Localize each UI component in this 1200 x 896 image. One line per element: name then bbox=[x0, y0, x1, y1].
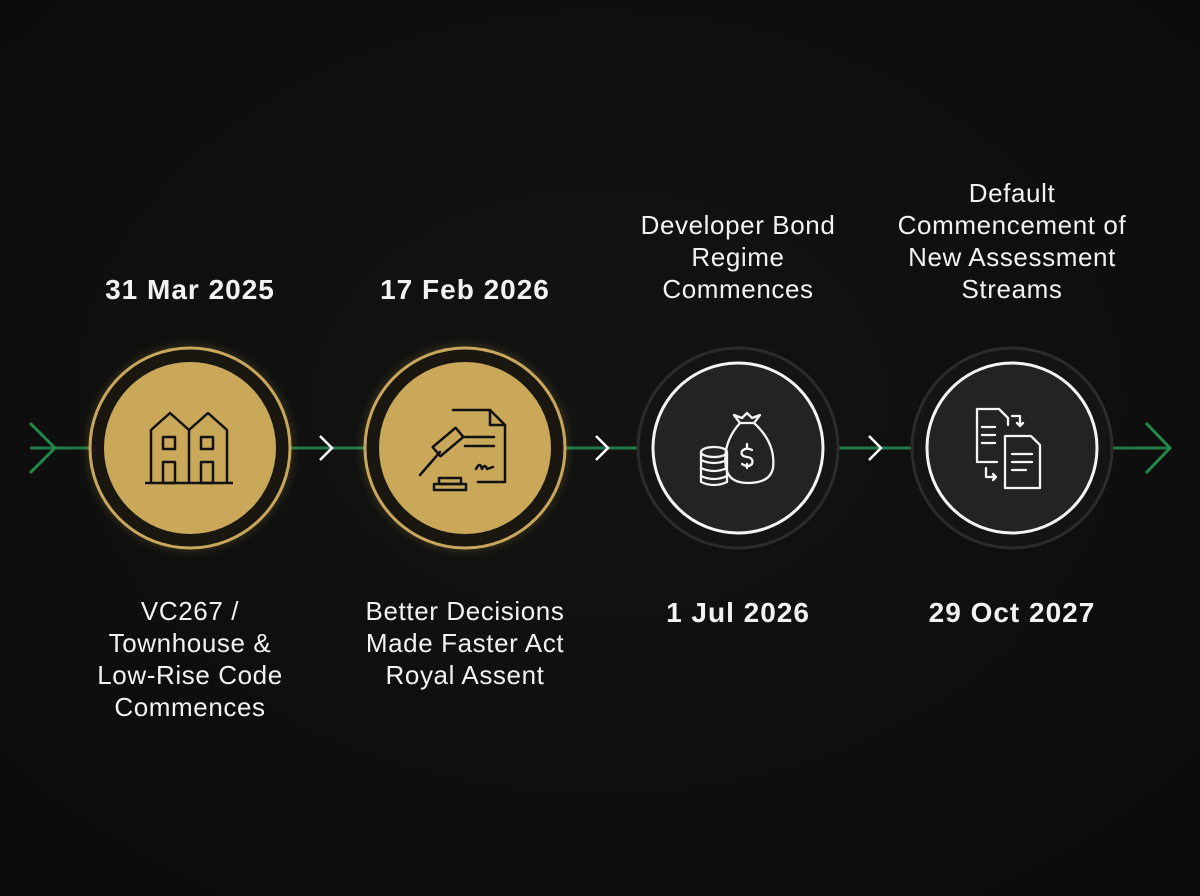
milestone 2: Better Decisions bbox=[366, 596, 564, 626]
milestone 3: Commences bbox=[662, 274, 814, 304]
milestone 2 bbox=[365, 274, 565, 690]
milestone 4: Streams bbox=[961, 274, 1063, 304]
milestone 1 bbox=[90, 274, 290, 722]
milestone 4: New Assessment bbox=[908, 242, 1116, 272]
icon: gavel and document bbox=[420, 410, 505, 490]
milestone 2: 17 Feb 2026 bbox=[380, 274, 550, 305]
milestone 1: 31 Mar 2025 bbox=[105, 274, 275, 305]
milestone 3 bbox=[638, 210, 838, 628]
milestone 1: Townhouse & bbox=[109, 628, 271, 658]
milestone 4: 29 Oct 2027 bbox=[929, 597, 1095, 628]
milestone 4 bbox=[898, 178, 1126, 628]
milestone 3: 1 Jul 2026 bbox=[666, 597, 810, 628]
milestone 3: Developer Bond bbox=[641, 210, 835, 240]
milestone 1: Commences bbox=[114, 692, 266, 722]
milestone 4: Default bbox=[969, 178, 1055, 208]
icon: money bag and coins bbox=[701, 413, 773, 485]
timeline line bbox=[30, 423, 1170, 473]
milestone 2: Made Faster Act bbox=[366, 628, 564, 658]
milestone 4: Commencement of bbox=[898, 210, 1126, 240]
arrow: chevron 2 bbox=[596, 436, 608, 460]
milestone 3: Regime bbox=[691, 242, 785, 272]
milestone 1: Low-Rise Code bbox=[97, 660, 283, 690]
arrow: chevron 1 bbox=[320, 436, 332, 460]
arrow: chevron 3 bbox=[869, 436, 881, 460]
icon: townhouses bbox=[145, 413, 233, 483]
milestone 1: VC267 / bbox=[141, 596, 239, 626]
icon: documents exchange bbox=[977, 409, 1040, 488]
milestone 2: Royal Assent bbox=[386, 660, 545, 690]
